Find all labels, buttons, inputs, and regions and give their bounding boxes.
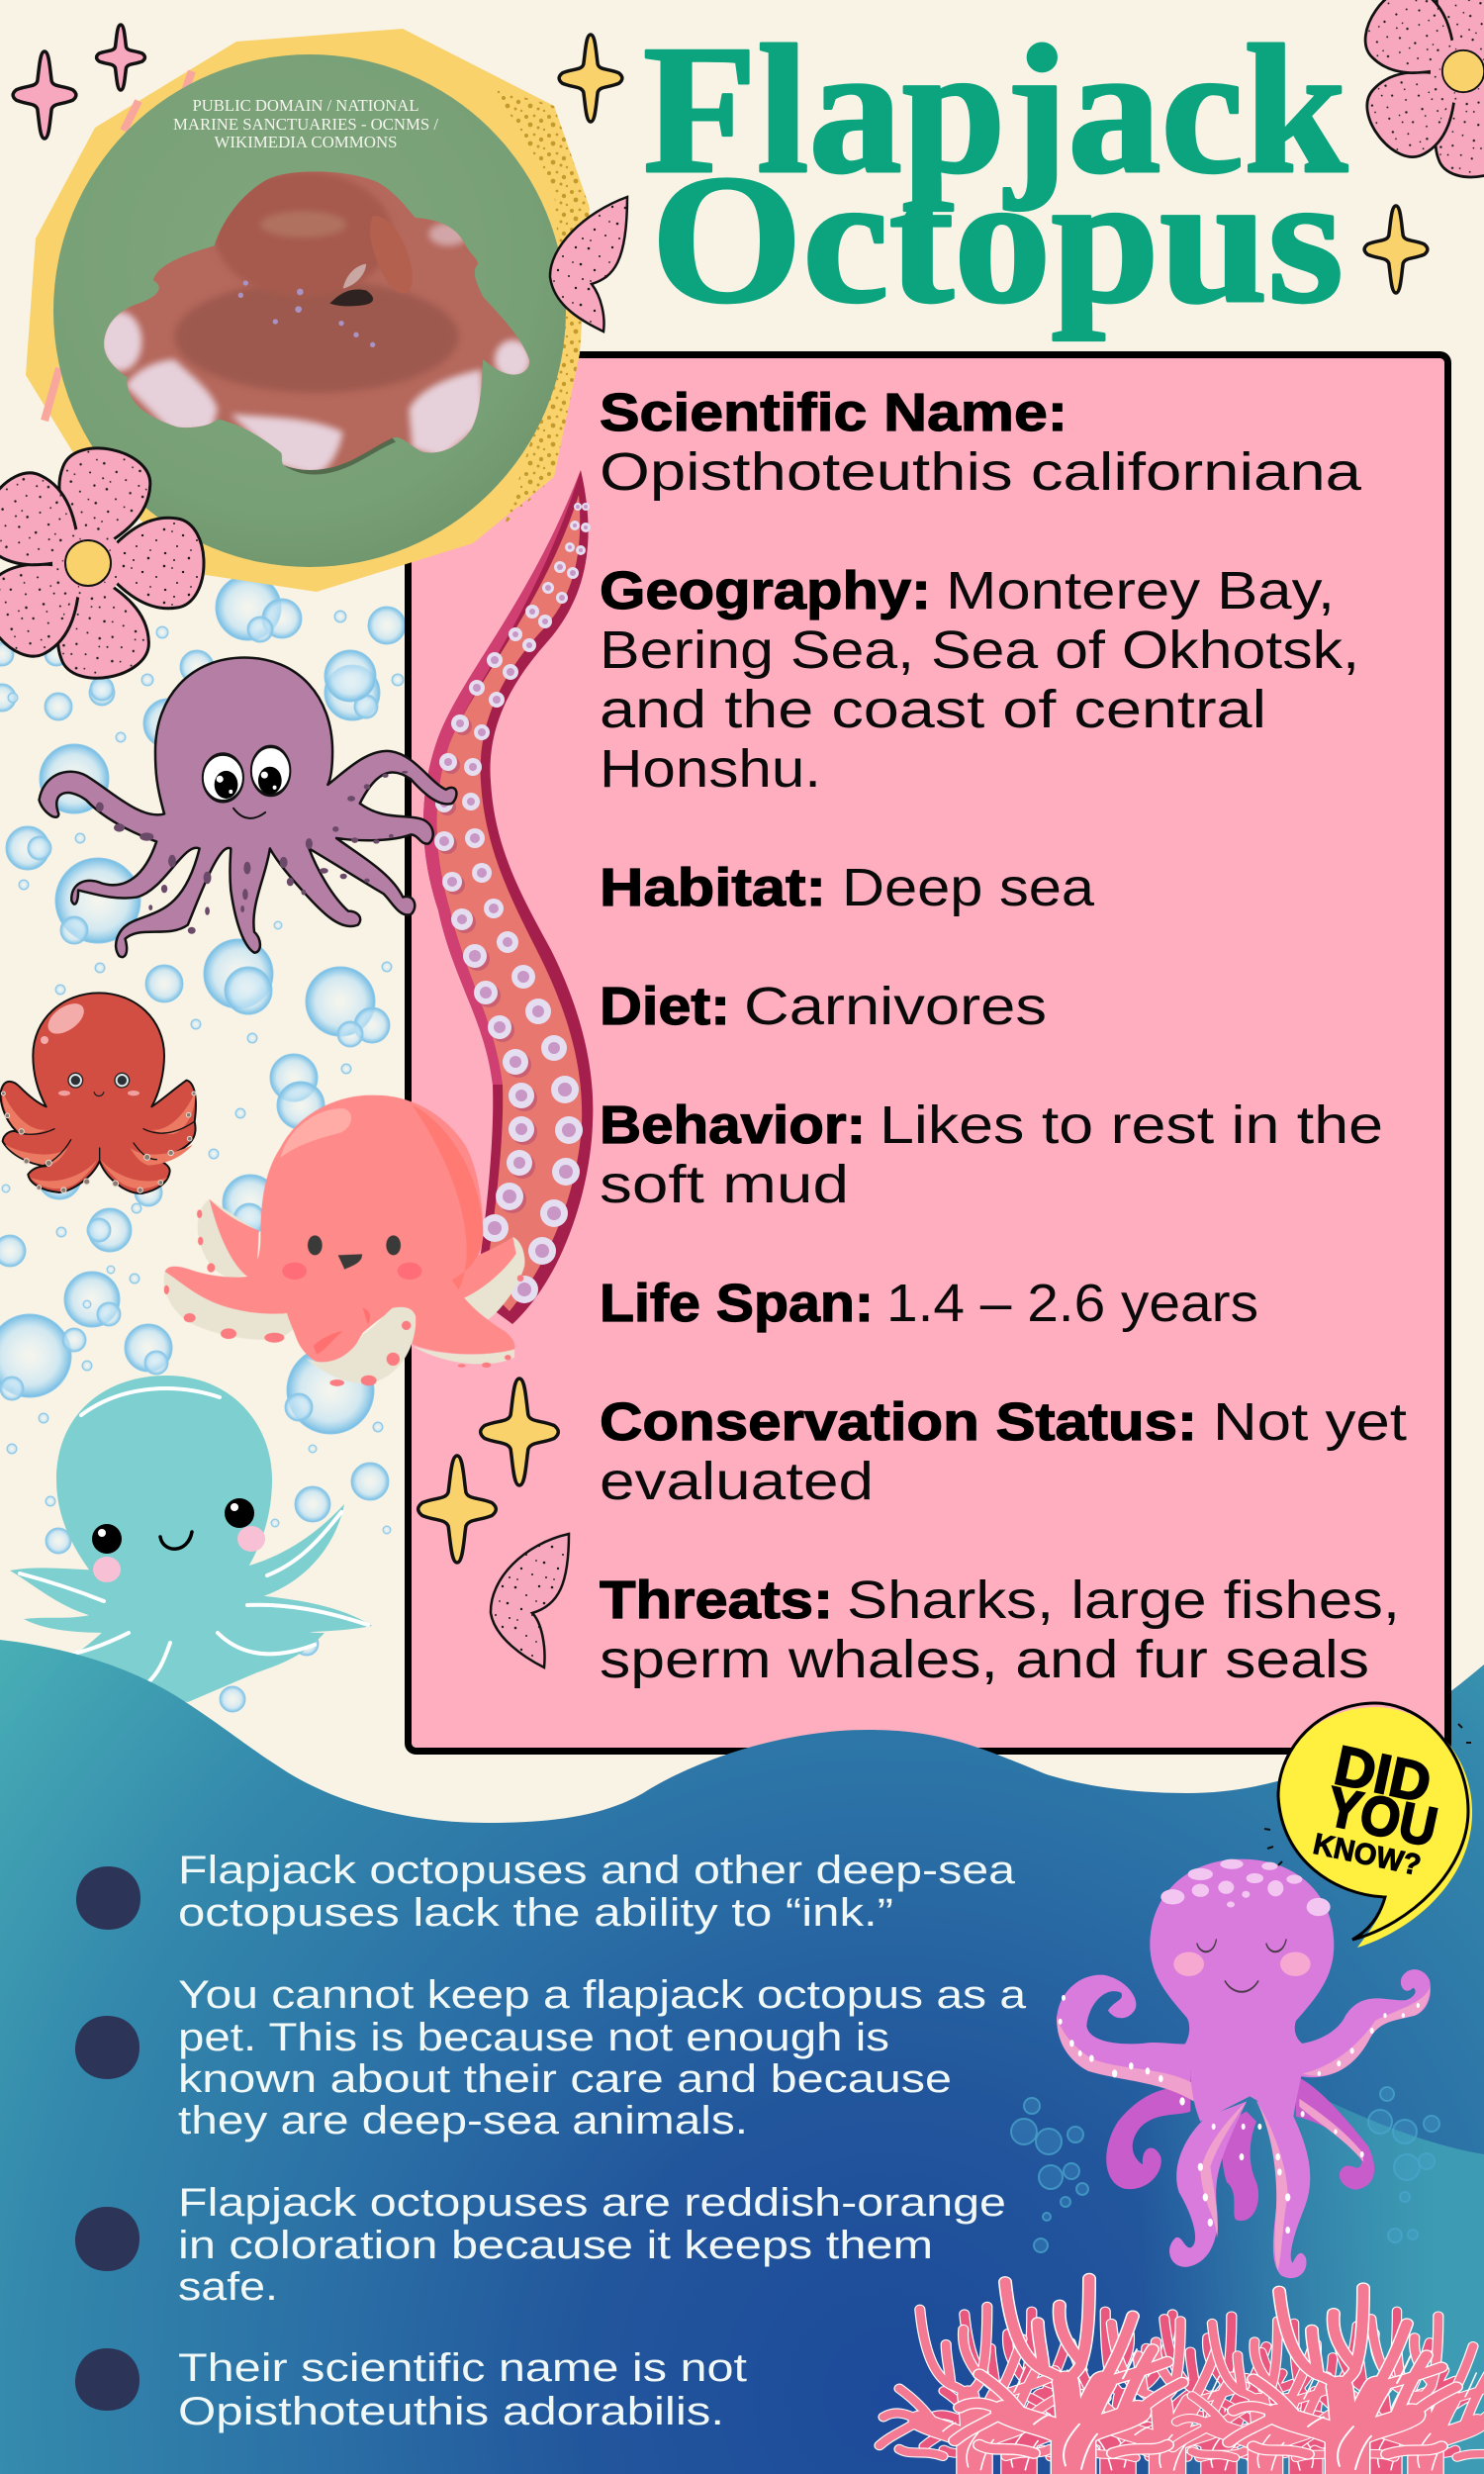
fact 1 text: octopuses lack the ability to “ink.” — [178, 1891, 893, 1935]
did you know speech bubble — [1264, 1703, 1472, 1948]
fact 3 text: Flapjack octopuses are reddish-orange — [178, 2181, 1006, 2225]
corals — [880, 2279, 1484, 2474]
magenta head spots — [1160, 1859, 1331, 1916]
light coral layer — [880, 2279, 1484, 2474]
tentacle suckers outer — [434, 503, 591, 1303]
tentacle inner — [437, 495, 582, 1311]
behavior: Likes to rest in the — [880, 1095, 1383, 1155]
red arm undersides — [3, 1092, 195, 1189]
geography: Geography: — [600, 561, 931, 620]
fact 2 text: pet. This is because not enough is — [178, 2016, 889, 2059]
fact 3 text: in coloration because it keeps them — [178, 2224, 933, 2267]
octopus eye flap — [343, 264, 366, 289]
purple octopus silhouette — [40, 658, 456, 957]
dark coral layer — [924, 2312, 1466, 2474]
octopus head tone — [215, 171, 393, 297]
scientific name — [600, 383, 1362, 502]
leaf: top — [550, 197, 627, 332]
threats — [600, 1570, 1400, 1689]
speckles on frame — [495, 89, 590, 524]
octopus dark gap — [329, 289, 373, 306]
photo credit: PUBLIC DOMAIN / NATIONAL — [192, 96, 419, 115]
title line: Flapjack: Flapjack — [643, 8, 1348, 212]
diet: Diet: — [600, 977, 730, 1036]
teal octopus — [10, 1376, 372, 1702]
magenta arm dots — [1059, 1995, 1420, 2234]
coral octopus face — [282, 1235, 421, 1280]
red eyes — [68, 1073, 130, 1088]
fact 4 bullet — [75, 2348, 139, 2411]
scientific name: Opisthoteuthis californiana — [600, 442, 1362, 502]
bubbles background — [0, 575, 406, 1712]
coral octopus head shade — [413, 1105, 483, 1289]
fact 4 text — [178, 2346, 747, 2433]
bubble accent ticks — [1264, 1724, 1471, 1865]
red head highlight — [41, 998, 89, 1044]
photo: flapjack octopus — [53, 54, 566, 567]
sparkles — [13, 25, 1428, 1563]
scientific name: Scientific Name: — [600, 383, 1067, 442]
fact 2 text — [178, 1973, 1027, 2142]
teal octopus arms — [10, 1504, 372, 1702]
tentacle suckers inner — [439, 505, 588, 1296]
octopus base colour — [104, 172, 530, 470]
tentacle — [423, 470, 593, 1324]
purple suckers — [96, 771, 408, 934]
coral octopus highlight — [280, 1108, 351, 1158]
coral octopus suckers — [164, 1209, 523, 1386]
photo frame blob — [26, 29, 590, 592]
threats: Threats: — [600, 1570, 833, 1630]
flower: top right — [1352, 0, 1484, 184]
red octopus — [1, 993, 196, 1193]
tentacle outer skin — [423, 470, 593, 1324]
fact 4 text: Their scientific name is not — [178, 2346, 747, 2390]
tentacle suckers shadow — [437, 717, 537, 1213]
light teal wave — [1088, 2053, 1484, 2474]
magenta lower arm stripes — [1200, 2099, 1363, 2270]
octopus dark mantle — [175, 280, 458, 393]
purple eye highlights — [217, 772, 277, 794]
geography: Bering Sea, Sea of Okhotsk, — [600, 620, 1359, 680]
behavior: Behavior: — [600, 1095, 866, 1155]
right wave — [791, 1665, 1484, 2474]
sparkle pink 1 — [13, 51, 76, 139]
octopus pale fringe — [99, 223, 531, 475]
geography: Honshu. — [600, 739, 821, 799]
magenta head and body — [1150, 1859, 1334, 2122]
magenta lower arms — [1169, 2101, 1310, 2278]
habitat: Deep sea — [842, 858, 1095, 917]
species facts text — [600, 383, 1407, 1689]
magenta back arms — [1106, 2076, 1374, 2221]
photo credit — [173, 96, 438, 151]
life span: Life Span: — [600, 1274, 874, 1333]
threats: Sharks, large fishes, — [847, 1570, 1400, 1630]
habitat — [600, 858, 1095, 917]
conservation status — [600, 1392, 1407, 1511]
fact 2 text: they are deep-sea animals. — [178, 2099, 748, 2142]
octopus shadow under body — [284, 438, 396, 475]
fact 3 bullet — [75, 2207, 139, 2271]
conservation status: Not yet — [1213, 1392, 1407, 1452]
magenta right curl arm — [1299, 1969, 1431, 2077]
behavior — [600, 1095, 1383, 1214]
teal octopus face — [92, 1498, 265, 1582]
magenta left curl arm — [1057, 1975, 1190, 2086]
purple octopus — [40, 658, 456, 957]
coral octopus — [164, 1095, 524, 1386]
fact 3 text — [178, 2181, 1006, 2309]
sparkle pink 2 — [97, 25, 144, 90]
magenta right arm stripe — [1303, 1988, 1430, 2076]
conservation status: Conservation Status: — [600, 1392, 1197, 1452]
octopus clipped body layers — [104, 172, 530, 470]
bubble text: YOU: YOU — [1322, 1774, 1442, 1858]
sparkle yellow right — [1364, 206, 1428, 293]
photo credit: MARINE SANCTUARIES - OCNMS / — [173, 115, 438, 134]
tentacle left edge — [423, 470, 581, 1085]
geography — [600, 561, 1359, 799]
did you know facts — [75, 1849, 1027, 2433]
diet — [600, 977, 1047, 1036]
coral octopus pink arm tops — [165, 1199, 516, 1314]
bubble outline — [1278, 1703, 1468, 1940]
geography: Monterey Bay, — [946, 561, 1335, 620]
bubble text: DID: DID — [1330, 1734, 1437, 1814]
fact 2 text: known about their care and because — [178, 2057, 952, 2101]
leaf: panel — [491, 1534, 569, 1667]
fact 1 text — [178, 1849, 1016, 1935]
magenta left arm stripe — [1057, 2016, 1194, 2101]
red suckers — [1, 1092, 196, 1192]
magenta face — [1173, 1940, 1311, 1992]
fact 4 text: Opisthoteuthis adorabilis. — [178, 2390, 724, 2433]
sparkle yellow panel 1 — [481, 1379, 558, 1485]
fact 2 bullet — [75, 2016, 139, 2079]
diet: Carnivores — [744, 977, 1047, 1036]
octopus in photo — [79, 158, 544, 485]
red arm separators — [17, 1121, 195, 1166]
panel: species facts background — [408, 354, 1448, 1752]
sparkle yellow top — [559, 35, 622, 122]
title — [643, 8, 1348, 341]
photo seabed — [53, 54, 566, 567]
faint bubbles around magenta octopus — [1011, 2087, 1439, 2252]
yellow torn paper — [26, 29, 590, 592]
fact 1 text: Flapjack octopuses and other deep-sea — [178, 1849, 1016, 1892]
coral octopus curled arm — [307, 1307, 416, 1383]
fact 2 text: You cannot keep a flapjack octopus as a — [178, 1973, 1027, 2017]
bubble body — [1278, 1707, 1472, 1948]
life span: 1.4 – 2.6 years — [886, 1274, 1258, 1333]
conservation status: evaluated — [600, 1452, 874, 1511]
sparkle yellow panel 2 — [418, 1456, 496, 1563]
bubble text: KNOW?: KNOW? — [1310, 1828, 1424, 1882]
flower: left — [0, 440, 204, 686]
threats: sperm whales, and fur seals — [600, 1630, 1369, 1689]
magenta octopus — [1057, 1859, 1431, 2278]
teal octopus head — [56, 1376, 272, 1623]
life span — [600, 1274, 1258, 1333]
coral octopus head and body — [247, 1095, 514, 1368]
fact 3 text: safe. — [178, 2265, 278, 2309]
photo credit: WIKIMEDIA COMMONS — [214, 133, 398, 151]
purple smile — [233, 809, 265, 818]
red octopus silhouette — [1, 993, 196, 1193]
coral octopus body folds — [314, 1308, 370, 1354]
fact 1 bullet — [76, 1866, 140, 1930]
left wave — [0, 1640, 1088, 2474]
title line: Octopus: Octopus — [651, 138, 1344, 341]
octopus pale spots — [238, 280, 375, 347]
geography: and the coast of central — [600, 680, 1266, 739]
purple eyes — [203, 746, 290, 802]
pink strips on frame — [45, 71, 192, 421]
coral octopus cream arms — [164, 1199, 524, 1364]
behavior: soft mud — [600, 1155, 849, 1214]
octopus fin — [370, 216, 413, 293]
teal octopus highlights — [20, 1388, 368, 1682]
octopus head light patch — [260, 211, 346, 238]
habitat: Habitat: — [600, 858, 826, 917]
red cheeks and mouth — [58, 1091, 139, 1096]
